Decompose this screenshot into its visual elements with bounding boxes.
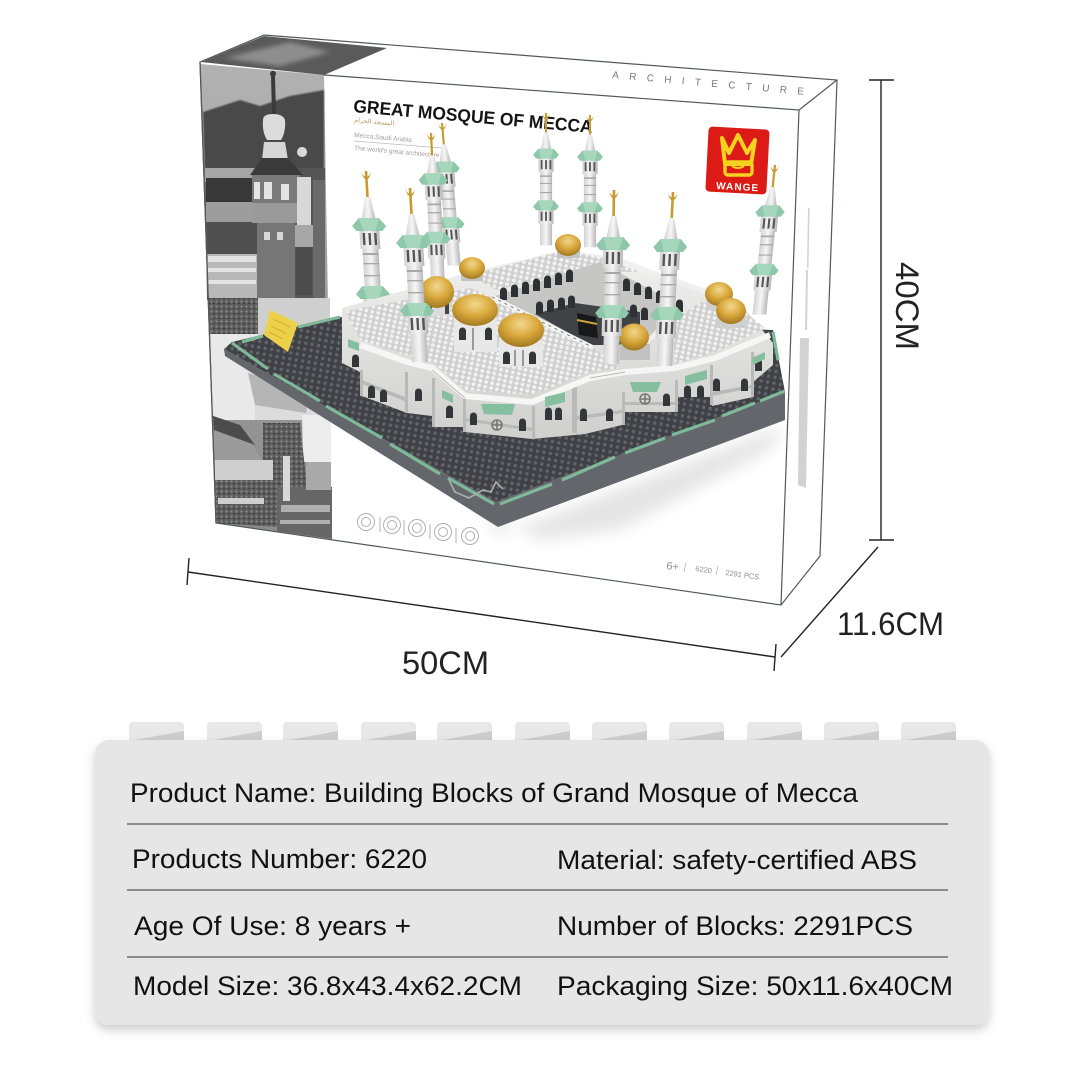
box age and piece count: 6220 (695, 564, 712, 575)
product box (200, 35, 837, 605)
feature icons row (358, 514, 478, 544)
box age and piece count: 6+ (666, 560, 680, 574)
spec: model size: Model Size: 36.8x43.4x62.2CM (133, 971, 522, 1001)
baseplate (224, 317, 785, 527)
back roof studs (470, 250, 640, 290)
front minarets (393, 188, 690, 366)
icon: WANGE logo: WANGE (716, 181, 759, 194)
box edge lines (200, 35, 837, 605)
green awnings (348, 339, 765, 415)
building body (342, 250, 773, 439)
tower (270, 71, 276, 114)
right roof studs (672, 302, 765, 364)
front-left roof studs (345, 288, 620, 395)
spec: material: Material: safety-certified ABS (557, 845, 917, 875)
mosque model (224, 113, 790, 540)
facade shaded joints (360, 352, 754, 439)
dimension: 11.6CM depth: 11.6CM (837, 606, 944, 642)
box subtitle text: The world's great architecture (354, 145, 440, 159)
yellow plaque (264, 310, 298, 352)
box title: GREAT MOSQUE OF MECCA (353, 96, 593, 137)
arcade rows (500, 270, 683, 320)
distant buildings (205, 168, 325, 300)
kaaba (577, 313, 598, 338)
lower: crowd and balcony (208, 298, 260, 335)
box outline faces (200, 35, 837, 605)
golden domes (420, 234, 746, 367)
spec: packaging size: Packaging Size: 50x11.6x40CM (557, 971, 953, 1001)
window ornaments (492, 394, 650, 430)
side panel fine print (798, 208, 810, 488)
top face dark photo band (201, 36, 387, 75)
spec: product name: Product Name: Building Blocks of Grand Mosque of Mecca (130, 778, 859, 808)
courtyard (492, 262, 740, 348)
spec: block count: Number of Blocks: 2291PCS (557, 911, 913, 941)
spec panel (95, 740, 989, 1025)
box age and piece count (666, 560, 760, 582)
dimension: 50CM width: 50CM (402, 645, 489, 681)
box subtitle text: المسجد الحرام (354, 117, 395, 128)
front arches (352, 354, 762, 431)
box age and piece count: 2291 PCS (725, 568, 760, 582)
roof ledges (360, 335, 770, 402)
back minarets (349, 113, 790, 345)
dimension: 50CM width (187, 558, 776, 681)
courtyard rails (492, 297, 592, 347)
icon: WANGE logo (705, 126, 770, 195)
spec: product number: Products Number: 6220 (132, 844, 427, 874)
dimension: 40CM height: 40CM (889, 262, 925, 350)
brick studs on top of spec panel (129, 722, 956, 746)
box subtitle text (354, 117, 442, 159)
box subtitle text: Mecca,Saudi Arabia (354, 132, 412, 144)
spec: age: Age Of Use: 8 years + (134, 911, 411, 941)
lid label: ARCHITECTURE: ARCHITECTURE (612, 70, 807, 98)
mountain (203, 90, 324, 180)
baseplate shadow (480, 425, 785, 540)
dimension: 11.6CM depth (781, 547, 944, 657)
photo strip on left of box (200, 64, 332, 539)
dimension: 40CM height (869, 80, 925, 540)
